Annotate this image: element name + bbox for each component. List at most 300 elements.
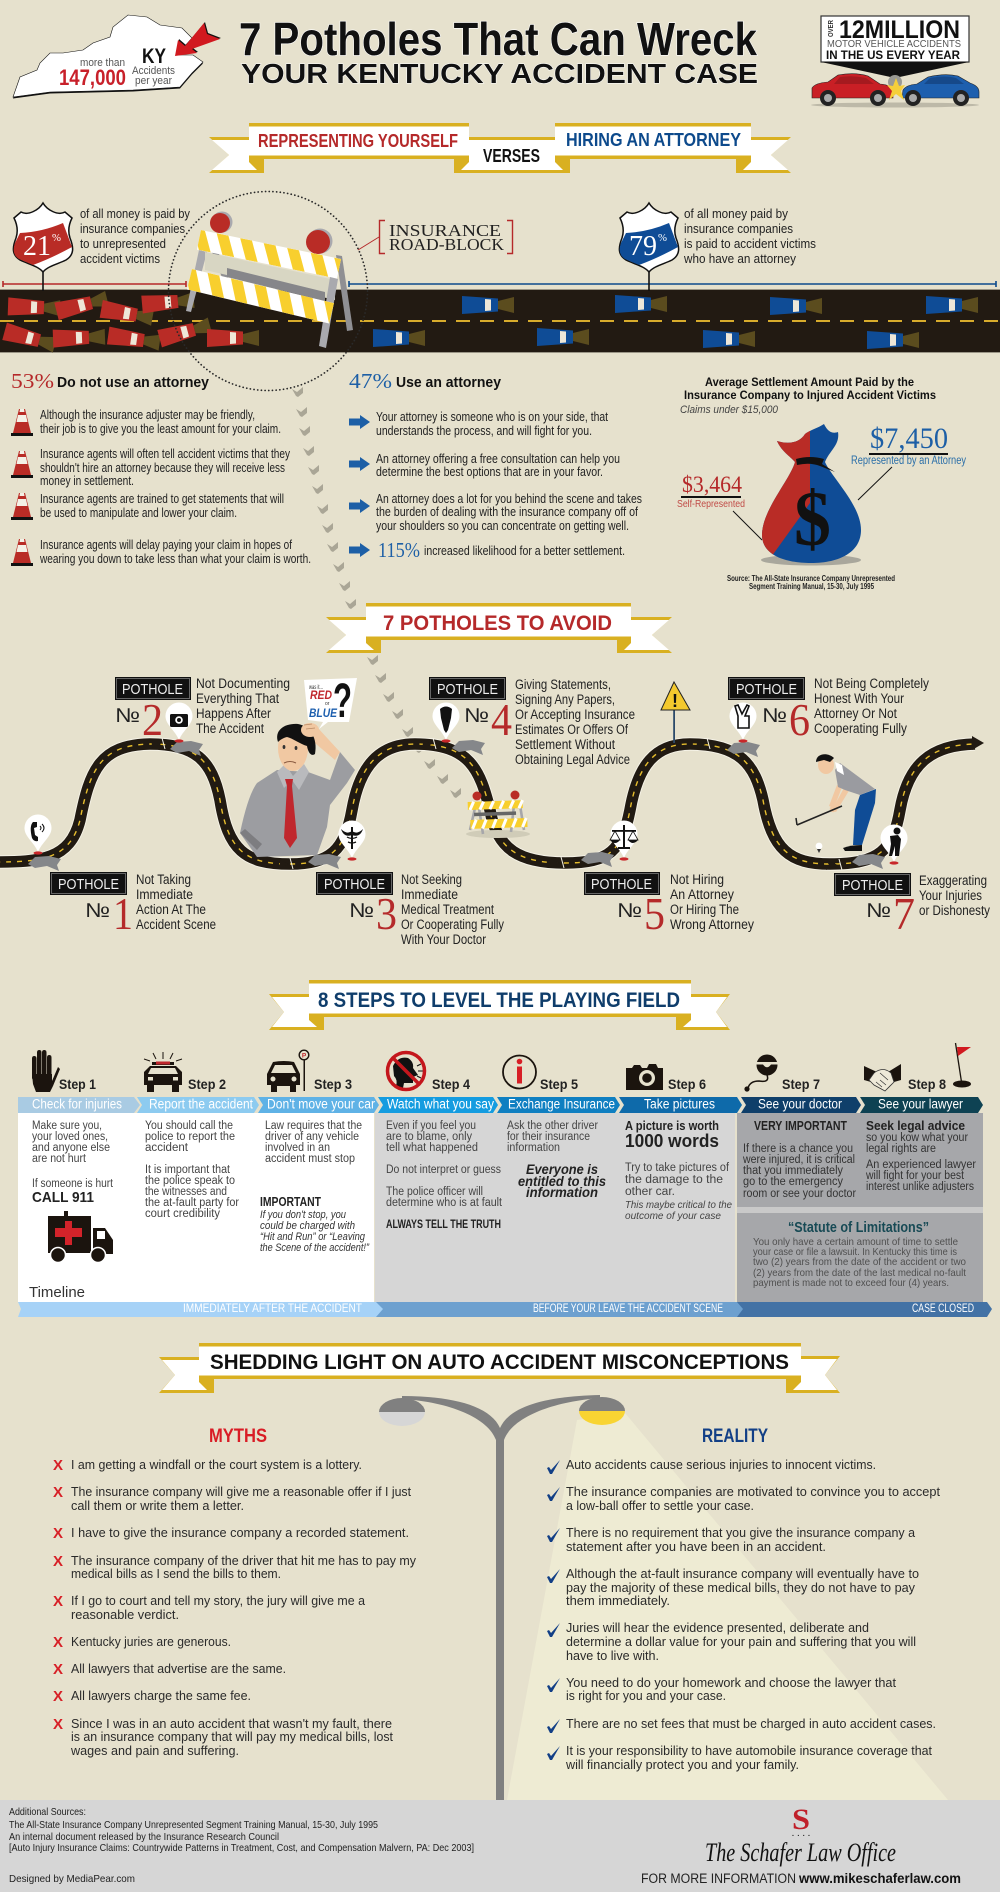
banner: 7 potholes to avoid — [326, 603, 672, 653]
pothole 4 — [429, 677, 635, 767]
icon: handshake — [864, 1064, 901, 1091]
step 4 text: are to blame, only — [386, 1131, 472, 1143]
panel: 47 percent use an attorney — [349, 369, 642, 562]
reality column: pay the majority of these medical bills, they do not have to pay — [566, 1580, 915, 1595]
step 3 text: If you don't stop, you — [260, 1209, 346, 1221]
step tabs: See your doctor — [758, 1096, 842, 1112]
pothole 4: Estimates Or Offers Of — [515, 722, 628, 737]
label: insurance road-block: INSURANCE — [389, 221, 501, 240]
pothole 6: POTHOLE — [736, 681, 797, 698]
pothole 1: Accident Scene — [136, 917, 216, 932]
pin: camera — [166, 702, 192, 743]
step 4 text: Even if you feel you — [386, 1120, 476, 1132]
pothole 2: The Accident — [196, 721, 264, 736]
pothole 7: Exaggerating — [919, 873, 987, 888]
step 2 text: the witnesses and — [145, 1186, 227, 1198]
panel: 53 percent do not use an attorney: money in settlement. — [40, 474, 134, 488]
pothole 6: № — [762, 705, 787, 727]
icon: police car — [144, 1052, 182, 1092]
myths column: X — [53, 1484, 63, 1501]
header: 12 million callout with crashing cars: OVER — [828, 20, 835, 37]
pothole 3: With Your Doctor — [401, 932, 486, 947]
statute of limitations: two (2) years from the date of the accident or two — [753, 1256, 966, 1268]
pin: crossed fingers — [730, 702, 756, 743]
step 5 text: information — [526, 1185, 598, 1200]
icon: car with parking sign: P — [302, 1052, 307, 1060]
step 7 text: If there is a chance you — [743, 1143, 853, 1155]
footer: law office logo: www.mikeschaferlaw.com — [798, 1870, 961, 1886]
title: YOUR KENTUCKY ACCIDENT CASE — [241, 58, 758, 89]
myths column — [53, 1426, 416, 1758]
text: 79 percent of money: who have an attorney — [683, 252, 797, 266]
speech bubble: was it red or blue — [304, 675, 357, 729]
step 2 text: accident — [145, 1142, 189, 1154]
pothole 4: № — [464, 705, 489, 727]
pin: scales of justice — [610, 820, 638, 861]
panel: 53 percent do not use an attorney: Insurance agents will often tell accident victims that they — [40, 447, 291, 461]
shield: 79 percent: % — [658, 232, 667, 244]
label: insurance road-block: ROAD-BLOCK — [389, 235, 505, 254]
speech bubble: was it red or blue: BLUE — [309, 706, 338, 720]
road with cars — [0, 289, 1000, 353]
large barricade: insurance road-block — [179, 212, 356, 348]
pothole 4: Giving Statements, — [515, 677, 611, 692]
pothole 2: № — [115, 705, 140, 727]
header: 12 million callout with crashing cars: 12MILLION — [839, 16, 960, 44]
myths column: All lawyers charge the same fee. — [71, 1688, 251, 1703]
shield: 21 percent — [13, 203, 73, 291]
myths column: I have to give the insurance company a recorded statement. — [71, 1525, 409, 1540]
pothole 7: Your Injuries — [919, 888, 982, 903]
statute of limitations: payment is made not to exceed four (4) years. — [753, 1277, 949, 1289]
text: 21 percent of money: insurance companies — [80, 222, 185, 236]
pothole 5: POTHOLE — [591, 876, 652, 893]
step tabs: Take pictures — [644, 1096, 715, 1112]
footer: sources: [Auto Injury Insurance Claims: Countrywide Patterns in Treatment, Cost, and Compensation Malvern, PA: Dec 2003] — [9, 1842, 474, 1854]
step 7 label: Step 7 — [782, 1076, 820, 1092]
panel: average settlement money bag: Claims under $15,000 — [680, 404, 779, 416]
reality column: will financially protect you and your family. — [565, 1757, 799, 1772]
step 6 text: A picture is worth — [625, 1118, 719, 1133]
step 1 text — [32, 1120, 114, 1206]
panel: average settlement money bag: Insurance Company to Injured Accident Victims — [684, 388, 936, 402]
panel: average settlement money bag — [677, 375, 966, 591]
myths column: X — [53, 1553, 63, 1570]
step 1 text: your loved ones, — [32, 1131, 108, 1143]
panel: 47 percent use an attorney: your shoulders so you can concentrate on getting well. — [376, 519, 629, 533]
pothole 1: Action At The — [136, 902, 206, 917]
panel: average settlement money bag: $7,450 — [870, 422, 948, 455]
step 8 text: Seek legal advice — [866, 1118, 965, 1133]
text: 79 percent of money: is paid to accident victims — [684, 237, 816, 251]
pothole 6: Honest With Your — [814, 691, 904, 706]
pothole 3: Medical Treatment — [401, 902, 494, 917]
panel: average settlement money bag: $3,464 — [682, 472, 742, 497]
step 4 text: determine who is at fault — [386, 1197, 503, 1209]
step 1 text: and anyone else — [32, 1142, 110, 1154]
myths column: Kentucky juries are generous. — [71, 1634, 231, 1649]
statute of limitations: your case or file a lawsuit. In Kentucky this time is — [753, 1246, 957, 1258]
icon: no talking — [388, 1052, 424, 1090]
step 1 text: CALL 911 — [32, 1189, 94, 1206]
pothole 3: 3 — [376, 888, 397, 939]
pothole 6: Cooperating Fully — [814, 721, 907, 736]
panel: 47 percent use an attorney: understands the process, and will fight for you. — [376, 424, 592, 438]
panel: 47 percent use an attorney: the burden of dealing with the insurance company off of — [376, 505, 638, 519]
step 8 text: will fight for your best — [865, 1170, 965, 1182]
banner: representing yourself verses hiring an attorney: HIRING AN ATTORNEY — [566, 130, 741, 150]
panel: 53 percent do not use an attorney: be used to manipulate and lower your claim. — [40, 506, 237, 520]
myths column: X — [53, 1593, 63, 1610]
panel: 53 percent do not use an attorney: Although the insurance adjuster may be friendly, — [40, 408, 255, 422]
light beam from street lamp — [507, 1413, 948, 1800]
icon: car with parking sign — [267, 1050, 309, 1092]
text: 79 percent of money: of all money paid by — [684, 207, 789, 221]
reality column — [547, 1426, 940, 1772]
header: Kentucky accident stat: Accidents — [132, 65, 175, 77]
statute of limitations: You only have a certain amount of time to settle — [753, 1236, 958, 1248]
pothole 4: Obtaining Legal Advice — [515, 752, 630, 767]
pothole 2 — [115, 676, 290, 745]
pothole 4: Settlement Without — [515, 737, 615, 752]
reality column: a low-ball offer to settle your case. — [566, 1498, 754, 1513]
footer panel — [0, 1800, 1000, 1892]
myths column: X — [53, 1716, 63, 1733]
myths column: MYTHS — [209, 1426, 267, 1447]
blue cars: represented — [373, 295, 978, 349]
step 1 text: If someone is hurt — [32, 1178, 114, 1190]
step 3 text: IMPORTANT — [260, 1194, 321, 1209]
icon: information — [503, 1056, 536, 1088]
myths column: The insurance company will give me a reasonable offer if I just — [71, 1484, 411, 1499]
pothole 5: № — [617, 900, 642, 922]
speech bubble: was it red or blue: or — [325, 701, 330, 707]
reality column: REALITY — [702, 1426, 768, 1447]
step tabs — [18, 1096, 983, 1113]
red cars: unrepresented — [2, 290, 259, 353]
pin: caduceus — [338, 820, 366, 861]
pothole 6: Not Being Completely — [814, 676, 929, 691]
reality column: determine a dollar value for your pain and suffering that you will — [566, 1634, 916, 1649]
banner: representing yourself verses hiring an attorney: VERSES — [483, 146, 540, 166]
reality column: Auto accidents cause serious injuries to innocent victims. — [566, 1457, 876, 1472]
panel: 47 percent use an attorney: An attorney offering a free consultation can help you — [376, 452, 620, 466]
panel: 53 percent do not use an attorney: Insurance agents will delay paying your claim in hopes of — [40, 538, 292, 552]
speech bubble: was it red or blue: ? — [333, 675, 352, 728]
text: 21 percent of money: accident victims — [80, 252, 160, 266]
footer: law office logo: .... — [792, 1831, 810, 1838]
footer: sources: An internal document released by the Insurance Research Council — [9, 1831, 279, 1843]
step 6 text: outcome of your case — [625, 1210, 721, 1222]
reality column: Although the at-fault insurance company will eventually have to — [566, 1566, 919, 1581]
banner: 7 potholes to avoid: 7 POTHOLES TO AVOID — [383, 612, 612, 635]
header: Kentucky accident stat — [13, 15, 221, 98]
panel: average settlement money bag: Self-Represented — [677, 498, 745, 510]
panel: 47 percent use an attorney: Use an attorney — [396, 374, 502, 391]
reality column: them immediately. — [566, 1593, 670, 1608]
pothole 3 — [316, 820, 504, 947]
step 3 text: driver of any vehicle — [265, 1131, 359, 1143]
man scratching head — [240, 723, 355, 857]
step 3 text: could be charged with — [260, 1220, 355, 1232]
road joint arrows — [149, 738, 842, 870]
banner: 8 steps to level the playing field — [269, 980, 730, 1030]
pothole 5: An Attorney — [670, 887, 734, 902]
header: Kentucky accident stat: 147,000 — [59, 65, 126, 90]
reality column: Juries will hear the evidence presented, deliberate and — [566, 1620, 869, 1635]
icon: camera — [626, 1064, 663, 1090]
pothole 6 — [728, 676, 929, 745]
panel: average settlement money bag: Source: The All-State Insurance Company Unrepresented — [727, 574, 895, 583]
banner: representing yourself verses hiring an attorney: REPRESENTING YOURSELF — [258, 131, 458, 151]
pothole 6: 6 — [789, 694, 810, 745]
pin: phone — [24, 814, 52, 855]
step 2 text: the at-fault party for — [145, 1197, 239, 1209]
step 4 text: Do not interpret or guess — [386, 1164, 501, 1176]
timeline arrow bar: IMMEDIATELY AFTER THE ACCIDENT — [183, 1303, 362, 1315]
pothole 7: or Dishonesty — [919, 903, 990, 918]
step 4 text: tell what happened — [386, 1142, 478, 1154]
pothole 2: Happens After — [196, 706, 271, 721]
golfer — [796, 754, 876, 853]
myths column: The insurance company of the driver that hit me has to pay my — [71, 1553, 416, 1568]
step 6 text: the damage to the — [625, 1174, 723, 1186]
myths column: I am getting a windfall or the court system is a lottery. — [71, 1457, 362, 1472]
panel: 53 percent do not use an attorney: shouldn't hire an attorney because they will receive less — [40, 461, 285, 475]
step 4 text: The police officer will — [386, 1186, 483, 1198]
step 5 text: entitled to this — [518, 1174, 606, 1189]
pothole 3: Immediate — [401, 887, 458, 902]
myths column: If I go to court and tell my story, the jury will give me a — [71, 1593, 366, 1608]
timeline label: Timeline — [29, 1284, 85, 1301]
step 4 text: ALWAYS TELL THE TRUTH — [386, 1217, 501, 1231]
step 6 text: This maybe critical to the — [625, 1199, 732, 1211]
footer: sources: The All-State Insurance Company Unrepresented Segment Training Manual, 15-30, July 1995 — [9, 1819, 378, 1831]
myths column: X — [53, 1688, 63, 1705]
pothole 7: № — [866, 900, 891, 922]
pothole 7: POTHOLE — [842, 877, 903, 894]
proportion lines above road — [3, 281, 996, 287]
pothole 4: POTHOLE — [437, 681, 498, 698]
warning sign: ! — [672, 691, 678, 711]
small barricade — [466, 790, 530, 838]
step 3 text: accident must stop — [265, 1153, 355, 1165]
pothole 4: Or Accepting Insurance — [515, 707, 635, 722]
step 2 text: court credibility — [145, 1208, 220, 1220]
pin: person limping — [880, 824, 908, 865]
dotted magnifier circle — [168, 192, 368, 390]
reality column: It is your responsibility to have automobile insurance coverage that — [566, 1743, 932, 1758]
timeline arrow bar — [18, 1302, 992, 1317]
panel: average settlement money bag: Segment Training Manual, 15-30, July 1995 — [749, 582, 874, 591]
pothole 5 — [584, 820, 754, 939]
panel: 53 percent do not use an attorney: 53% — [11, 369, 54, 393]
step 8 text — [865, 1118, 976, 1193]
step 3 text: involved in an — [265, 1142, 330, 1154]
title — [239, 13, 758, 89]
step 3 label: Step 3 — [314, 1076, 352, 1092]
step 2 text: police to report the — [145, 1131, 235, 1143]
step 8 text: interest unlike adjusters — [866, 1181, 974, 1193]
pothole 5: Wrong Attorney — [670, 917, 754, 932]
pothole 1: POTHOLE — [58, 876, 119, 893]
panel: 53 percent do not use an attorney: wearing you down to take less than what your claim is worth. — [39, 552, 311, 566]
pothole 4: Signing Any Papers, — [515, 692, 615, 707]
text: 21 percent of money — [80, 207, 191, 266]
step 2 text: the police speak to — [145, 1175, 235, 1187]
pothole 1: 1 — [113, 888, 133, 939]
myths column: is an insurance company that will pay my medical bills, lost — [71, 1729, 393, 1744]
step 1 label: Step 1 — [59, 1076, 96, 1092]
panel: 53 percent do not use an attorney: their job is to give you the least amount for your claim. — [40, 422, 281, 436]
myths column: X — [53, 1457, 63, 1474]
footer: law office logo — [641, 1803, 961, 1886]
title: 7 Potholes That Can Wreck — [239, 13, 757, 65]
step 3 text: Law requires that the — [265, 1120, 362, 1132]
step 3 text — [260, 1120, 370, 1254]
myths column: X — [53, 1661, 63, 1678]
reality column: There is no requirement that you give the insurance company a — [566, 1525, 916, 1540]
timeline panels — [18, 1113, 983, 1302]
pothole 5: Or Hiring The — [670, 902, 739, 917]
banner: 8 steps to level the playing field: 8 STEPS TO LEVEL THE PLAYING FIELD — [318, 989, 680, 1012]
pothole 3: POTHOLE — [324, 876, 385, 893]
myths column: call them or write them a letter. — [71, 1498, 244, 1513]
icon: stethoscope — [744, 1054, 778, 1092]
step 5 text: information — [507, 1142, 560, 1154]
step 7 text: were injured, it is critical — [742, 1154, 855, 1166]
step 2 text: You should call the — [145, 1120, 233, 1132]
timeline arrow bar: CASE CLOSED — [912, 1303, 974, 1315]
step tabs: See your lawyer — [878, 1096, 963, 1112]
shield: 21 percent: % — [52, 232, 61, 244]
step 8 label: Step 8 — [908, 1076, 946, 1092]
shield: 79 percent — [619, 203, 679, 291]
step 4 label: Step 4 — [432, 1076, 470, 1092]
timeline arrow bar: BEFORE YOUR LEAVE THE ACCIDENT SCENE — [533, 1303, 723, 1315]
step 8 text: so you kow what your — [866, 1132, 968, 1144]
panel: 53 percent do not use an attorney: Do not use an attorney — [57, 374, 210, 391]
text: 21 percent of money: to unrepresented — [80, 237, 166, 251]
step 1 text: are not hurt — [32, 1153, 87, 1165]
myths column: All lawyers that advertise are the same. — [71, 1661, 286, 1676]
icon: golf flag — [953, 1043, 971, 1088]
text: 21 percent of money: of all money is paid by — [80, 207, 191, 221]
footer: sources — [9, 1806, 474, 1885]
pothole 2: Not Documenting — [196, 676, 290, 691]
step 6 text: Try to take pictures of — [625, 1162, 730, 1174]
pothole 1: № — [85, 900, 110, 922]
panel: average settlement money bag: Average Settlement Amount Paid by the — [705, 375, 914, 389]
winding road — [0, 736, 984, 864]
text: 79 percent of money: insurance companies — [684, 222, 793, 236]
pothole 6: Attorney Or Not — [814, 706, 897, 721]
pothole 2: POTHOLE — [122, 681, 183, 698]
pothole 2: Everything That — [196, 691, 279, 706]
header: 12 million callout with crashing cars — [811, 16, 979, 108]
shield: 21 percent: 21 — [23, 230, 51, 262]
step 2 text: It is important that — [145, 1164, 231, 1176]
step 7 text: go to the emergency — [743, 1176, 843, 1188]
pothole 3: № — [349, 900, 374, 922]
reality column: is right for you and your case. — [566, 1688, 726, 1703]
footer: law office logo: S — [792, 1803, 810, 1836]
step 2 text — [145, 1120, 239, 1220]
step 5 text — [507, 1120, 606, 1200]
pothole 7 — [834, 824, 990, 939]
step 7 text: that you immediately — [743, 1165, 843, 1177]
step 5 text: Everyone is — [526, 1162, 598, 1177]
banner: representing yourself verses hiring an attorney — [209, 123, 791, 173]
header: Kentucky accident stat: KY — [142, 45, 166, 68]
step 2 label: Step 2 — [188, 1076, 226, 1092]
reality column: have to live with. — [566, 1648, 659, 1663]
speech bubble: was it red or blue: was it... — [308, 685, 323, 691]
step tabs: Report the accident — [149, 1096, 253, 1112]
step 5 text: Ask the other driver — [507, 1120, 598, 1132]
myths column: medical bills as I send the bills to them. — [71, 1566, 281, 1581]
myths column: wages and pain and suffering. — [70, 1743, 239, 1758]
footer: law office logo: FOR MORE INFORMATION — [641, 1871, 796, 1886]
speech bubble: was it red or blue: RED — [310, 688, 332, 702]
text: 79 percent of money — [683, 207, 816, 266]
statute of limitations — [753, 1219, 966, 1289]
myths column: reasonable verdict. — [71, 1607, 179, 1622]
shield: 79 percent: 79 — [629, 230, 657, 262]
step tabs: Exchange Insurance — [508, 1096, 615, 1112]
footer: sources: Designed by MediaPear.com — [9, 1873, 135, 1885]
statute of limitations: “Statute of Limitations” — [788, 1219, 929, 1236]
pothole 1: Not Taking — [136, 872, 191, 887]
step 4 text — [386, 1120, 503, 1231]
header: Kentucky accident stat: more than — [80, 57, 125, 69]
banner: shedding light: SHEDDING LIGHT ON AUTO ACCIDENT MISCONCEPTIONS — [210, 1351, 789, 1374]
step 8 text: An experienced lawyer — [866, 1159, 976, 1171]
panel: 47 percent use an attorney: increased likelihood for a better settlement. — [424, 544, 625, 558]
step tabs: Check for injuries — [32, 1096, 122, 1112]
pothole 1 — [24, 814, 216, 939]
warning sign — [661, 682, 690, 743]
step 7 text: room or see your doctor — [743, 1188, 856, 1200]
step 3 text: “Hit and Run” or “Leaving — [260, 1231, 366, 1243]
pothole 7: 7 — [893, 888, 915, 939]
statute of limitations: (2) years from the date of the last medical no-fault — [753, 1267, 966, 1279]
step 6 text: other car. — [625, 1186, 675, 1198]
step 7 text: VERY IMPORTANT — [754, 1118, 847, 1133]
pothole 3: Or Cooperating Fully — [401, 917, 504, 932]
chevron trail from road-block to potholes — [292, 387, 461, 798]
panel: average settlement money bag: Represented by an Attorney — [851, 455, 966, 467]
icon: hand stop — [32, 1050, 60, 1092]
myths column: X — [53, 1634, 63, 1651]
panel: 47 percent use an attorney: 47% — [349, 369, 392, 393]
step 6 text: 1000 words — [625, 1131, 719, 1151]
myths column: Since I was in an auto accident that wasn't my fault, there — [71, 1716, 392, 1731]
pothole 5: 5 — [644, 888, 665, 939]
reality column: There are no set fees that must be charged in auto accident cases. — [566, 1716, 936, 1731]
header: Kentucky accident stat: per year — [135, 75, 172, 87]
panel: 53 percent do not use an attorney — [11, 369, 311, 566]
label: insurance road-block — [358, 220, 512, 254]
pothole 4: 4 — [491, 694, 512, 745]
pothole 2: 2 — [142, 694, 163, 745]
step 1 text: Make sure you, — [32, 1120, 102, 1132]
step 5 text: for their insurance — [507, 1131, 590, 1143]
header: 12 million callout with crashing cars: MOTOR VEHICLE ACCIDENTS — [827, 39, 961, 50]
pothole 5: Not Hiring — [670, 872, 724, 887]
street lamp — [379, 1395, 625, 1800]
pin: pen nib — [432, 702, 460, 743]
